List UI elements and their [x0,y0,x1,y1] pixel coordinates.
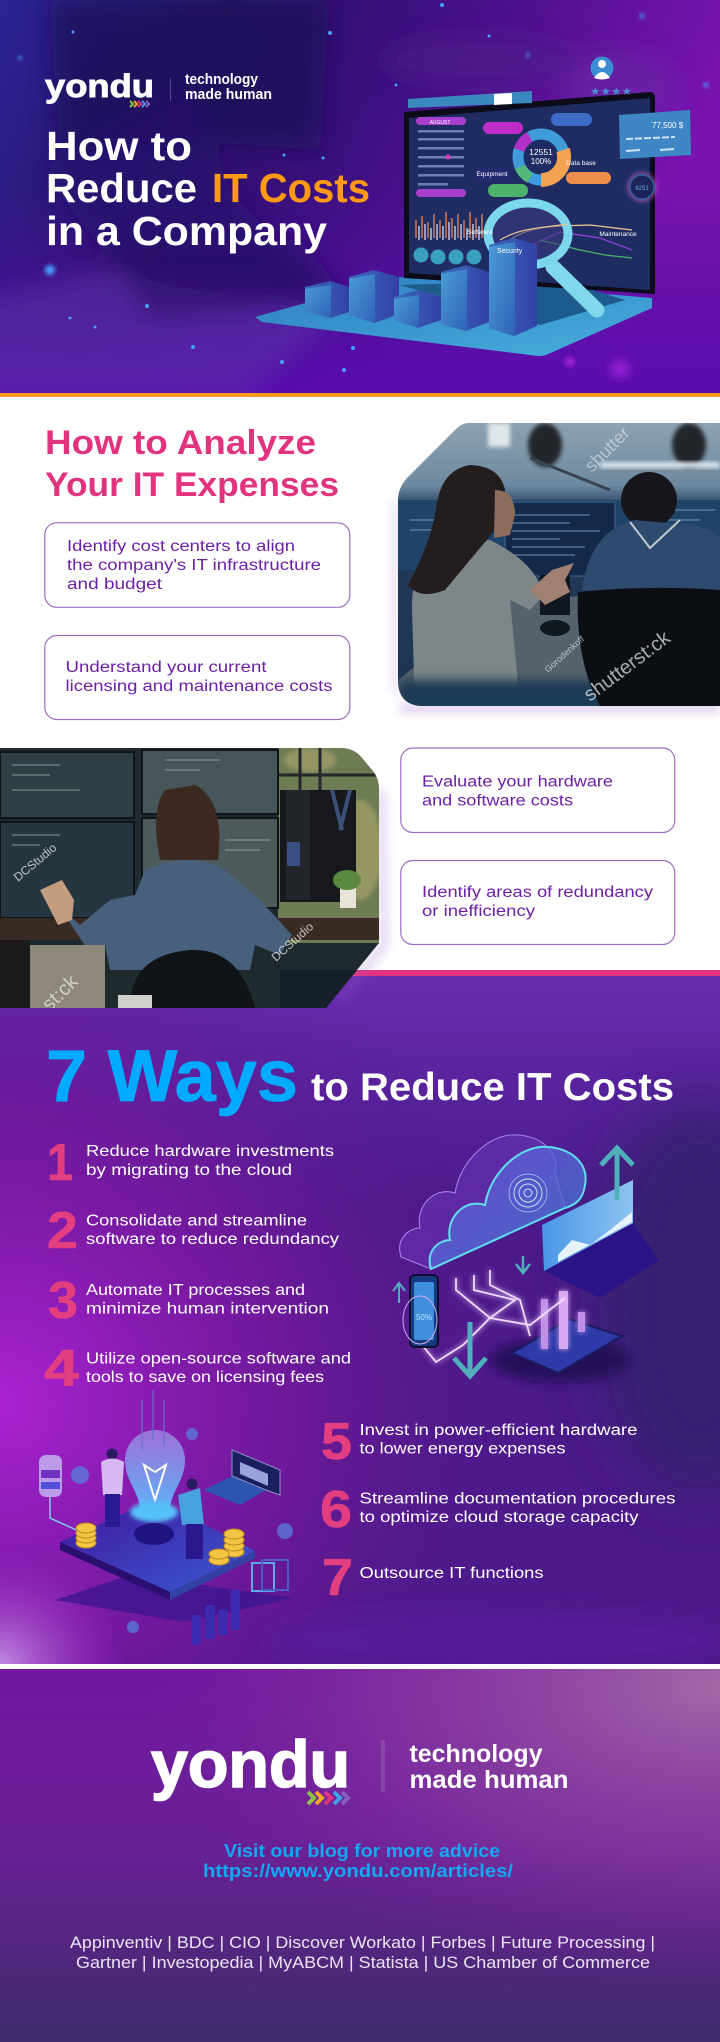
way 7: Outsource IT functions [360,1565,544,1582]
foreground blur [398,673,600,706]
panel: header hero [0,0,720,400]
credit card: 77,500 $ [652,121,684,130]
bars [192,1590,240,1645]
bulb [125,1430,185,1508]
card: hardware and software: Evaluate your hardware [422,774,613,790]
watermarks: shutterst:ck [580,626,675,706]
circuit lines [422,1270,565,1362]
heading: how to analyze [45,424,339,504]
way 6: 6 [320,1481,352,1539]
card: licensing and maintenance [45,636,350,720]
laptop dashboard illustration: Security [497,248,523,255]
blog call to action [203,1841,513,1881]
logo: made human [185,86,272,103]
chair [578,588,720,706]
watermarks: DCStudio [11,840,60,884]
tower [280,790,356,902]
title [46,123,370,254]
globes [71,1428,293,1633]
way 4: tools to save on licensing fees [86,1369,324,1386]
lower layer [55,1575,294,1622]
orange divider [0,393,720,397]
way 7 [322,1549,544,1607]
card: identify cost centers: and budget [67,576,163,593]
card: redundancy: or inefficiency [422,903,535,920]
photo: developer at multiple monitors: st:ck [38,970,83,1016]
database [39,1455,85,1534]
way 5: Invest in power-efficient hardware [360,1422,638,1439]
small laptop [204,1450,280,1505]
way 1: 1 [47,1134,73,1192]
round indicators [414,248,482,264]
way 6: to optimize cloud storage capacity [360,1509,639,1526]
card: licensing and maintenance: licensing and maintenance costs [66,678,333,695]
laptop dashboard illustration: Software [467,229,493,236]
illustration: cloud network [393,1135,659,1382]
laptop [544,1223,659,1298]
coins [76,1523,244,1565]
donut chart [518,134,564,180]
way 1: Reduce hardware investments [86,1143,334,1160]
blog call to action: Visit our blog for more advice [224,1841,500,1861]
tallest bar [489,238,537,336]
platform [60,1499,255,1592]
blurred background photo: hand and laptop [0,0,680,400]
photo: woman and man at monitors: Gorodenkoff [543,634,586,674]
credit card [619,110,691,159]
illustration: idea bulb platform [39,1390,294,1645]
phone [410,1275,438,1347]
photo: woman and man at monitors [392,423,720,720]
way 4: Utilize open-source software and [86,1350,351,1368]
way 3: Automate IT processes and [86,1282,305,1299]
logo: technology [185,71,259,88]
person one [101,1448,124,1527]
screen [404,92,655,294]
gauge: 8251 [635,186,649,192]
panel: footer [0,1669,720,2042]
logo [45,68,272,107]
way 5 [321,1413,638,1471]
heading: 7 ways [46,1036,674,1117]
panel: analyze section [0,397,720,976]
woman [412,540,540,684]
way 2 [47,1202,339,1260]
chip [252,1560,288,1591]
tablet [512,1319,622,1373]
photo: developer at multiple monitors [0,748,384,1016]
way 6: Streamline documentation procedures [360,1490,676,1508]
illustration: cloud network: 50% [416,1313,432,1322]
footer logo: yondu [151,1727,350,1801]
chair [130,950,255,1008]
card: redundancy: Identify areas of redundancy [422,884,653,901]
way 2: Consolidate and streamline [86,1212,307,1230]
card: identify cost centers: Identify cost centers to align [67,538,295,555]
heading: 7 ways: to Reduce IT Costs [311,1066,674,1109]
laptop dashboard illustration: Maintenance [599,231,637,238]
starfield [18,3,708,372]
sources [70,1933,655,1972]
way 2: 2 [47,1202,78,1260]
heading: how to analyze: Your IT Expenses [45,466,339,504]
line chart [510,225,632,258]
footer logo [151,1727,568,1804]
heading: how to analyze: How to Analyze [45,424,316,462]
window [278,748,379,943]
magnifier [488,203,597,310]
avatar [590,56,632,98]
desk [398,596,590,706]
way 1 [47,1134,334,1192]
laptop dashboard illustration: Data base [566,160,596,167]
photo: woman and man at monitors: shutter [581,423,634,476]
way 1: by migrating to the cloud [86,1162,292,1179]
back cloud [400,1135,565,1269]
card: identify cost centers [45,523,350,607]
card: identify cost centers: the company's IT infrastructure [67,557,321,574]
heading: 7 ways: 7 Ways [46,1036,298,1117]
title: IT Costs [212,165,370,211]
laptop dashboard illustration [255,56,691,356]
plant [340,888,356,908]
3D bars [305,265,489,331]
glowing bars [541,1291,585,1349]
dashboard pills [483,122,523,134]
laptop dashboard illustration: Equipment [476,171,508,178]
way 3: 3 [48,1272,78,1330]
logo: yondu [45,68,154,104]
avatar: ★★★★ [590,86,632,98]
monitor wall [398,500,720,570]
sources: Gartner | Investopedia | MyABCM | Statista | US Chamber of Commerce [76,1953,650,1972]
white divider [0,1664,720,1669]
photo: developer at multiple monitors: DCStudio [269,919,316,964]
way 2: software to reduce redundancy [86,1231,339,1248]
way 4: 4 [44,1340,79,1398]
panel: seven ways section [0,976,720,1670]
way 3: minimize human intervention [86,1300,329,1318]
card: hardware and software: and software costs [422,792,573,810]
laptop dashboard illustration: 100% [531,157,551,166]
person [156,785,219,860]
person two [178,1478,204,1559]
tabs [408,91,532,108]
chevrons [308,1792,348,1804]
pink divider [340,970,720,976]
cup and pencils [332,790,350,830]
spike chart [416,212,482,240]
title: Reduce [46,165,197,211]
front cloud [430,1147,586,1269]
footer logo: made human [410,1766,568,1794]
monitors [0,752,134,818]
laptop dashboard illustration: 12551 [529,147,553,157]
gauge [627,172,657,202]
teal arrows [393,1148,633,1376]
card: licensing and maintenance: Understand your current [66,659,267,676]
way 7: 7 [322,1549,353,1607]
calendar [416,117,466,197]
sources: Appinventiv | BDC | CIO | Discover Workato | Forbes | Future Processing | [70,1933,655,1952]
way 4 [44,1340,351,1398]
antenna lines [142,1390,164,1450]
way 3 [48,1272,329,1330]
calendar: AUGUST [430,120,450,126]
lower items [30,945,105,1008]
blog call to action: https://www.yondu.com/articles/ [203,1861,513,1881]
card: redundancy [401,860,675,944]
logo chevrons [130,101,149,107]
laptop base [255,277,652,356]
footer logo: technology [410,1740,543,1768]
title: How to [46,123,192,169]
man [621,472,677,528]
way 6 [320,1481,676,1539]
title: in a Company [46,208,327,254]
way 5: 5 [321,1413,352,1471]
way 5: to lower energy expenses [360,1440,566,1458]
card: hardware and software [401,748,675,832]
